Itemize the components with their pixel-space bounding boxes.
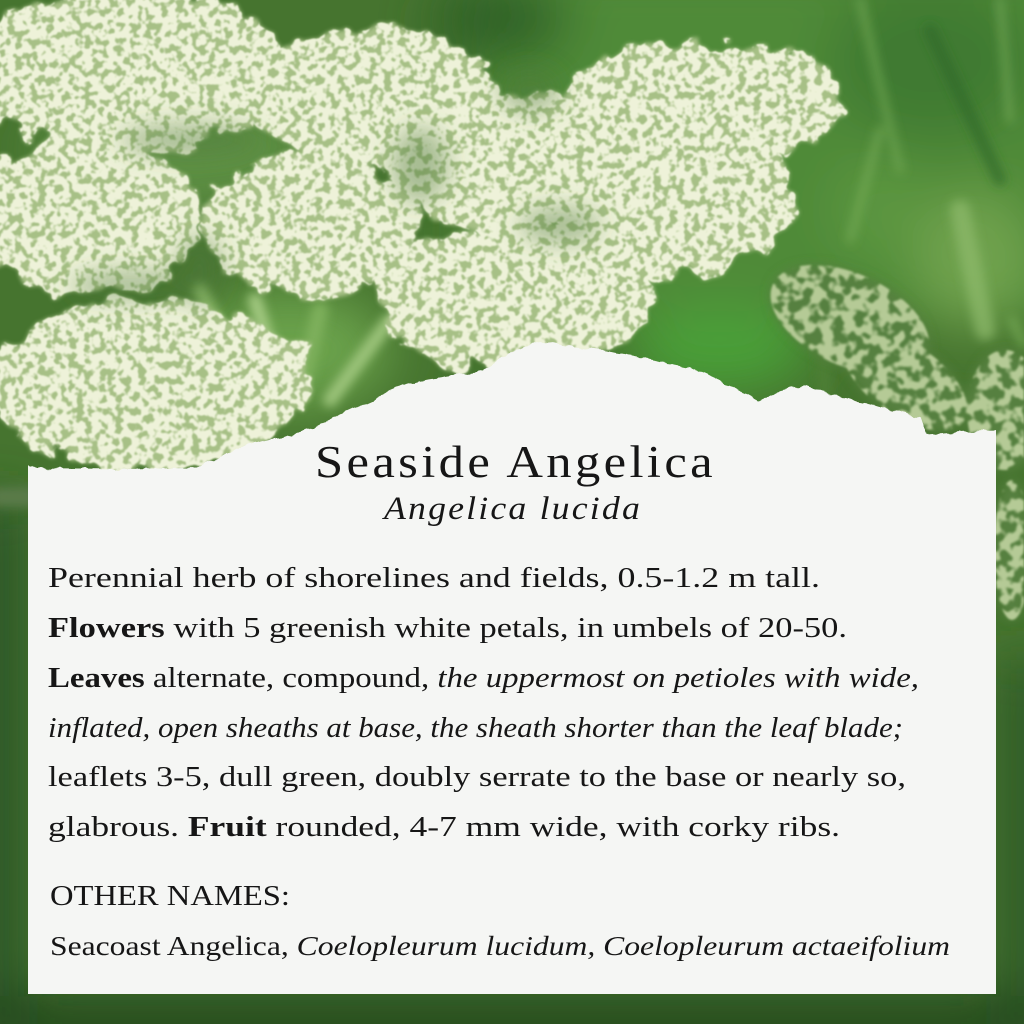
other names heading: OTHER NAMES: xyxy=(50,881,290,912)
torn white text panel xyxy=(10,341,1010,1010)
bud clusters: pale buds xyxy=(754,242,1024,620)
bud clusters: shaded base xyxy=(754,242,1024,620)
cluster shadows between umbels xyxy=(70,68,600,305)
grass streaks xyxy=(850,0,1024,345)
flower clusters: shaded base xyxy=(0,0,840,470)
description text block: Leaves alternate, compound, the uppermost on petioles with wide, xyxy=(48,662,919,694)
flower stems xyxy=(0,290,825,497)
description text block: leaflets 3-5, dull green, doubly serrate to the base or nearly so, xyxy=(48,761,906,793)
description text block: inflated, open sheaths at base, the sheath shorter than the leaf blade; xyxy=(48,712,903,744)
description text block: glabrous. Fruit rounded, 4-7 mm wide, with corky ribs. xyxy=(48,811,840,843)
description text block xyxy=(48,562,919,843)
title: Seaside Angelica xyxy=(315,437,716,487)
description text block: Perennial herb of shorelines and fields, 0.5-1.2 m tall. xyxy=(48,562,820,594)
description text block: Flowers with 5 greenish white petals, in umbels of 20-50. xyxy=(48,612,847,644)
scientific name: Angelica lucida xyxy=(382,491,642,527)
flower clusters: cream petals xyxy=(0,0,840,470)
other names list: Seacoast Angelica, Coelopleurum lucidum, Coelopleurum actaeifolium xyxy=(50,931,950,961)
